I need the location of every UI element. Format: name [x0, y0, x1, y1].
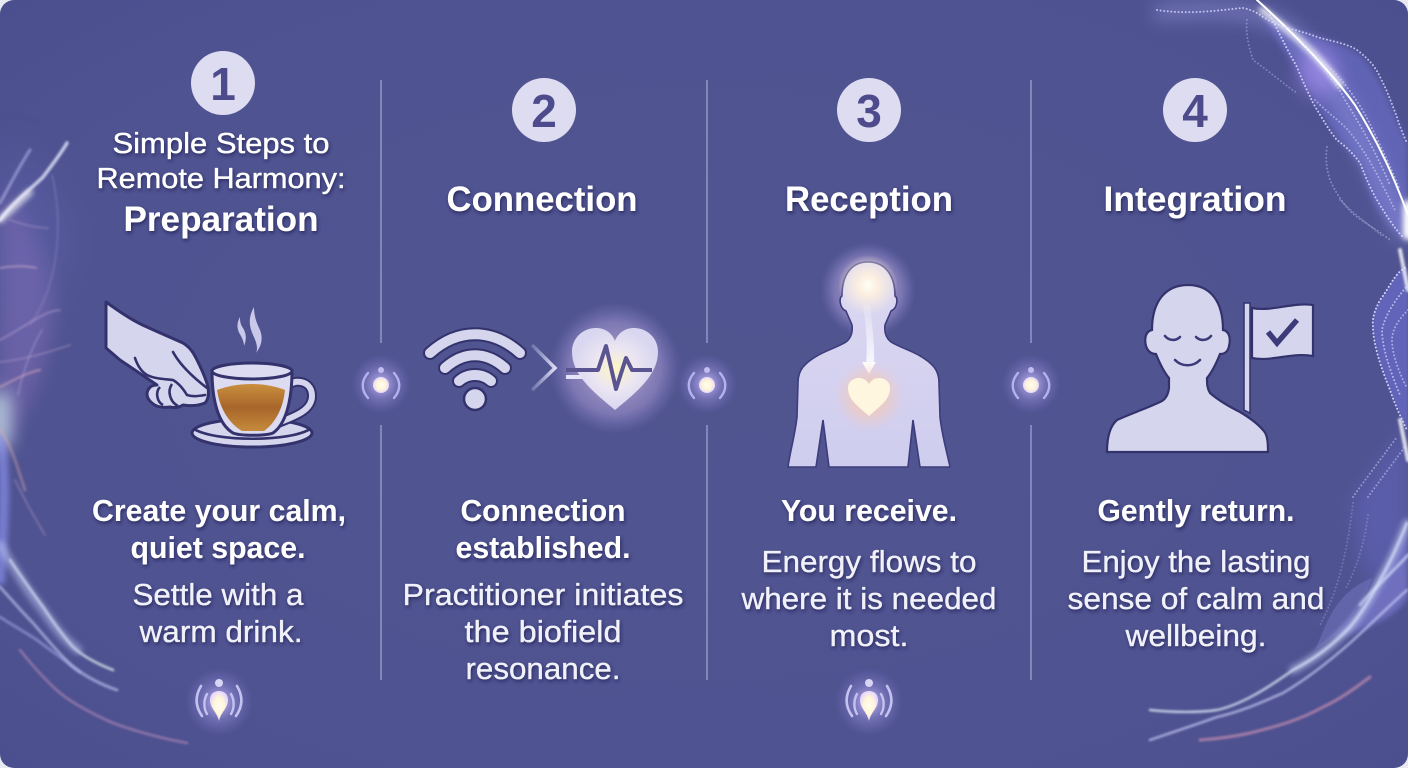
step number 4: 4 [1182, 85, 1208, 137]
decorative energy waves: right [1150, 0, 1408, 740]
text: create your calm: Settle with a [132, 577, 304, 612]
heading: simple steps preparation: Simple Steps to [112, 128, 330, 160]
icon: connector node 2 [677, 354, 737, 414]
step number 3 [837, 78, 901, 142]
column dividers [381, 80, 1031, 680]
panel: step 4 integration [1068, 78, 1324, 653]
text: gently return [1068, 493, 1324, 653]
text: connection established: Connection [460, 493, 626, 528]
text: you receive: You receive. [781, 493, 957, 528]
text: you receive: Energy flows to [762, 544, 976, 579]
heading: simple steps preparation: Remote Harmony: [96, 163, 346, 195]
text: gently return: wellbeing. [1124, 618, 1266, 653]
text: you receive [740, 493, 996, 653]
panel: step 1 preparation [92, 51, 346, 736]
icon: connector node 1 [351, 354, 411, 414]
heading: simple steps preparation: Preparation [124, 200, 318, 239]
text: create your calm: Create your calm, [92, 493, 346, 528]
decorative energy waves: left [0, 140, 187, 743]
icon: calm person with check flag [1107, 285, 1313, 452]
heading: integration: Integration [1104, 180, 1286, 219]
text: you receive: most. [830, 618, 908, 653]
heading: connection: Connection [446, 180, 638, 219]
text: create your calm [92, 493, 346, 649]
step number 4 [1163, 78, 1227, 142]
arrow: chevron [532, 345, 555, 390]
text: connection established: established. [456, 530, 630, 565]
step number 2: 2 [531, 85, 557, 137]
step number 1 [191, 51, 255, 115]
text: connection established: the biofield [464, 614, 622, 649]
text: create your calm: warm drink. [138, 614, 302, 649]
icon: bottom energy figure [835, 668, 903, 736]
icon: glowing heart with pulse [549, 302, 681, 434]
icon: connector node 3 [1001, 354, 1061, 414]
text: you receive: where it is needed [740, 581, 996, 616]
text: connection established [402, 493, 684, 686]
panel: step 3 reception [740, 78, 996, 736]
heading: reception: Reception [785, 180, 953, 219]
text: gently return: Gently return. [1098, 493, 1294, 528]
step number 1: 1 [210, 58, 236, 110]
icon: body receiving energy [788, 242, 950, 467]
text: connection established: resonance. [466, 651, 620, 686]
panel: step 2 connection [402, 78, 684, 686]
icon: hand holding tea cup [106, 302, 312, 447]
text: gently return: sense of calm and [1068, 581, 1324, 616]
step number 2 [512, 78, 576, 142]
heading: simple steps preparation [96, 128, 346, 239]
text: create your calm: quiet space. [130, 530, 306, 565]
icon: wifi signal [430, 334, 520, 410]
text: gently return: Enjoy the lasting [1082, 544, 1310, 579]
text: connection established: Practitioner initiates [402, 577, 684, 612]
icon: bottom energy figure [185, 668, 253, 736]
step number 3: 3 [856, 85, 882, 137]
